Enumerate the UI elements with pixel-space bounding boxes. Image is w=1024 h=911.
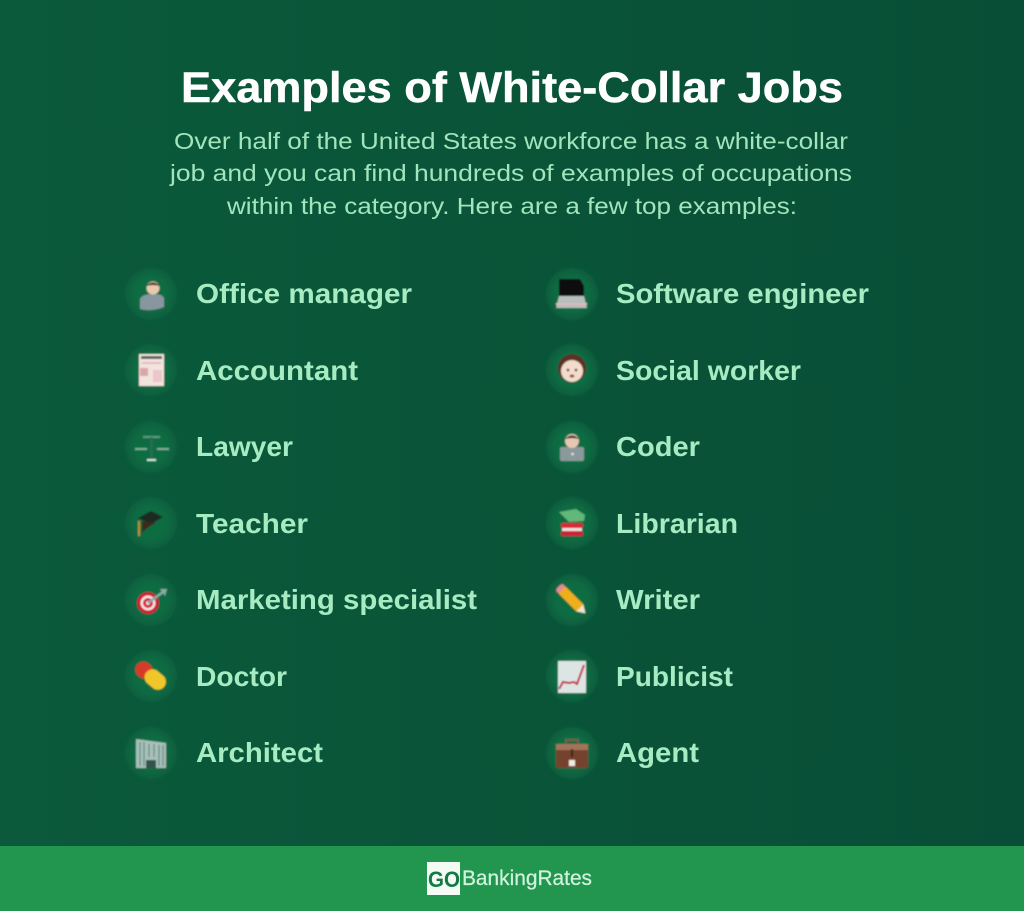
icon: pill: [122, 647, 180, 705]
logo wordmark: BankingRates: [462, 867, 592, 890]
intro text: [169, 128, 852, 219]
job: Marketing specialist: [122, 571, 477, 629]
intro text: Over half of the United States workforce has a white-collar: [174, 128, 848, 154]
job: Coder: Coder: [616, 431, 700, 462]
icon: target: [122, 571, 180, 629]
icon: pencil: [543, 571, 601, 629]
icon: scales: [122, 418, 180, 476]
job: Librarian: Librarian: [616, 508, 738, 539]
job: Doctor: Doctor: [196, 661, 287, 692]
job: Agent: Agent: [616, 737, 699, 768]
job: Accountant: Accountant: [196, 355, 358, 386]
icon: graduation cap: [122, 494, 180, 552]
icon: briefcase: [543, 724, 601, 782]
logo mark: GO: [427, 862, 460, 895]
job: Social worker: [543, 341, 801, 399]
title: Examples of White-Collar Jobs: [181, 64, 843, 112]
job: Architect: Architect: [196, 737, 323, 768]
logo: [427, 862, 592, 895]
job: Lawyer: [122, 418, 293, 476]
job: Writer: Writer: [616, 584, 700, 615]
icon: technologist: [543, 418, 601, 476]
icon: laptop: [543, 265, 601, 323]
job: Librarian: [543, 494, 738, 552]
icon: woman face: [543, 341, 601, 399]
job: Publicist: Publicist: [616, 661, 733, 692]
icon: building: [122, 724, 180, 782]
job: Architect: [122, 724, 323, 782]
logo mark: GO: GO: [428, 867, 460, 892]
job: Office manager: Office manager: [196, 278, 412, 309]
job: Coder: [543, 418, 700, 476]
job: Teacher: Teacher: [196, 508, 308, 539]
job: Accountant: [122, 341, 358, 399]
intro text: within the category. Here are a few top examples:: [226, 193, 797, 219]
icon: books: [543, 494, 601, 552]
icon: office worker: [122, 265, 180, 323]
job: Office manager: [122, 265, 412, 323]
job: Teacher: [122, 494, 308, 552]
job: Doctor: [122, 647, 287, 705]
job: Writer: [543, 571, 700, 629]
intro text: job and you can find hundreds of examples of occupations: [169, 160, 852, 186]
job: Publicist: [543, 647, 733, 705]
job: Software engineer: [543, 265, 869, 323]
footer band: [0, 846, 1024, 911]
icon: rising chart: [543, 647, 601, 705]
job: Social worker: Social worker: [616, 355, 801, 386]
job: Lawyer: Lawyer: [196, 431, 293, 462]
job: Marketing specialist: Marketing specialist: [196, 584, 477, 615]
job: Software engineer: Software engineer: [616, 278, 869, 309]
icon: ledger page: [122, 341, 180, 399]
job: Agent: [543, 724, 699, 782]
